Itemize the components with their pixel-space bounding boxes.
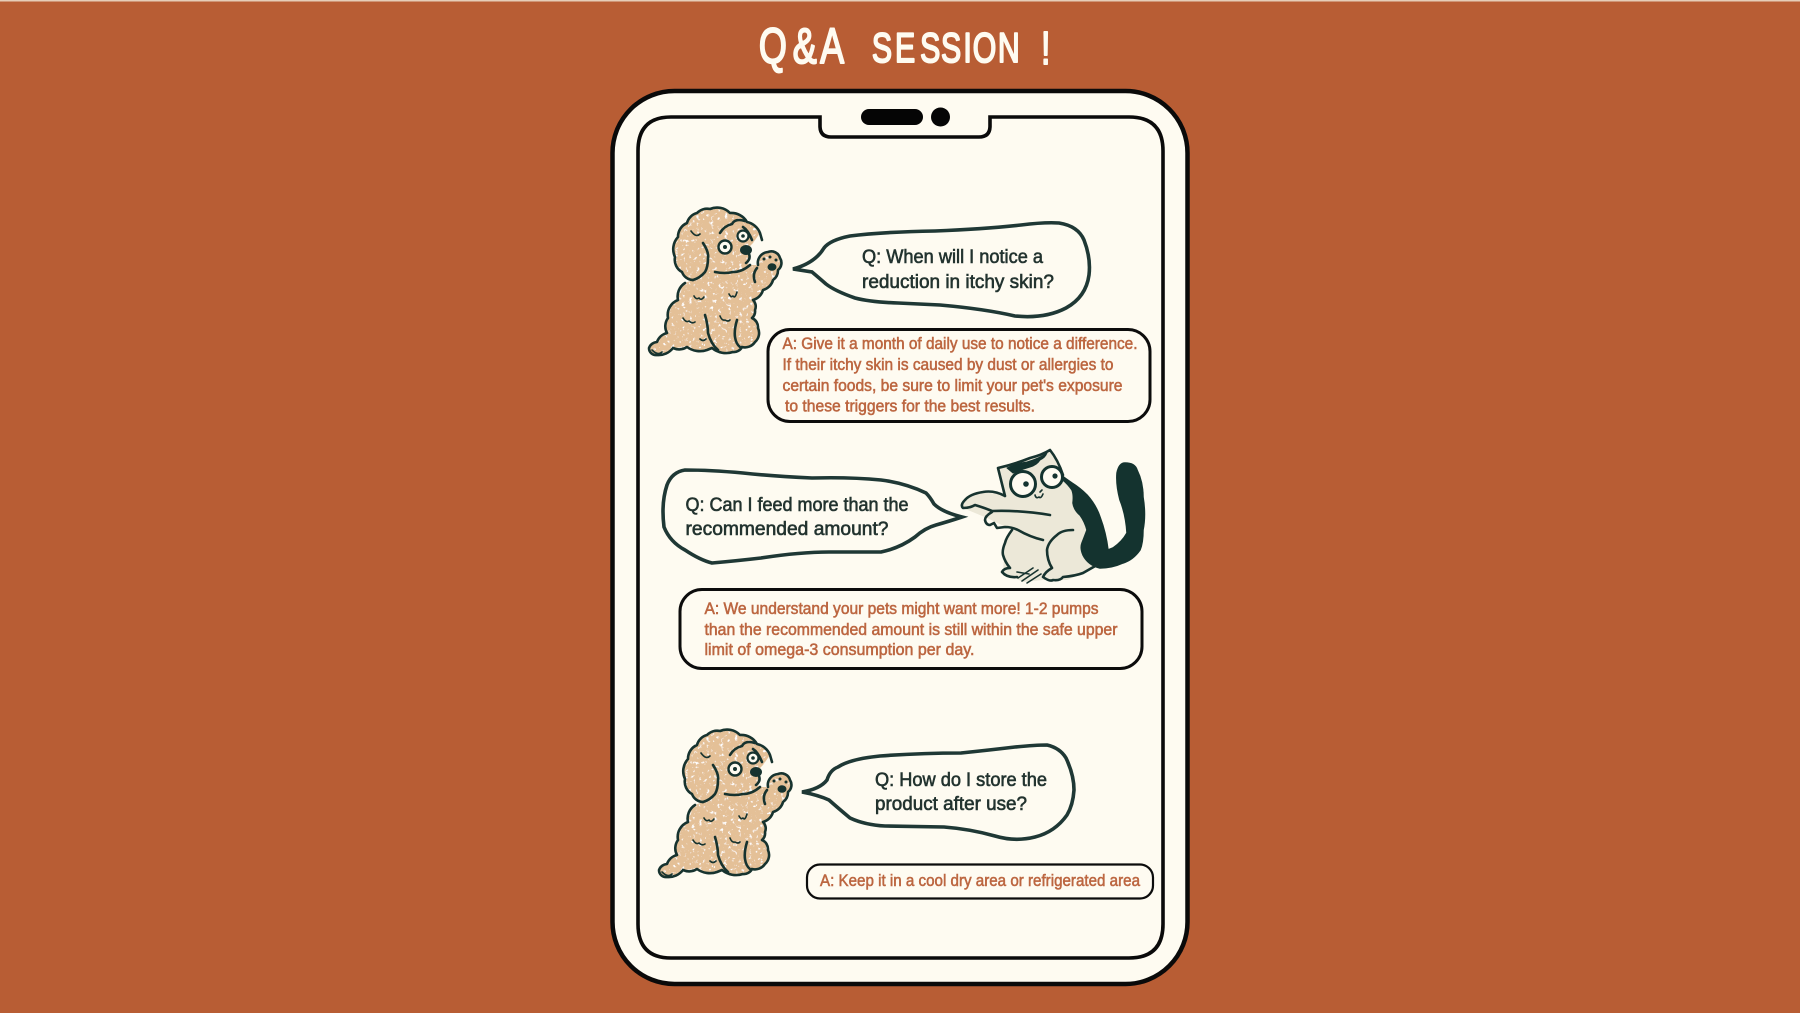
speech bubble 3 <box>802 745 1074 839</box>
answer box 1: to these triggers for the best results. <box>785 398 1035 416</box>
title: SESSION <box>872 24 1020 71</box>
answer box 3: A: Keep it in a cool dry area or refrigerated area <box>820 872 1141 890</box>
answer box 3 <box>807 864 1153 898</box>
answer box 1: If their itchy skin is caused by dust or allergies to <box>782 356 1114 374</box>
title: ! <box>1041 24 1050 74</box>
speech bubble 1 <box>793 223 1089 317</box>
answer box 1 <box>768 330 1150 422</box>
question 3 text: product after use? <box>875 793 1027 815</box>
question 3 text: Q: How do I store the <box>875 769 1047 791</box>
phone camera <box>931 108 950 126</box>
section: question 1 <box>649 208 1089 355</box>
section: question 2 <box>663 450 1144 583</box>
answer box 1: A: Give it a month of daily use to notice a difference. <box>782 335 1138 353</box>
answer box 2: A: We understand your pets might want more! 1-2 pumps <box>704 600 1098 618</box>
answer box 2: limit of omega-3 consumption per day. <box>704 641 974 659</box>
question 1 text: Q: When will I notice a <box>862 246 1043 268</box>
icon: dog <box>649 208 781 355</box>
answer box 2: than the recommended amount is still within the safe upper <box>704 621 1118 639</box>
question 2 text: recommended amount? <box>686 518 889 540</box>
icon: dog waving <box>659 730 791 877</box>
phone frame <box>612 91 1188 984</box>
speech bubble 2 <box>663 470 962 563</box>
answer box 2 <box>680 590 1142 668</box>
phone screen with notch <box>638 117 1163 958</box>
question 2 text: Q: Can I feed more than the <box>686 494 908 516</box>
answer box 1: certain foods, be sure to limit your pet's exposure <box>782 377 1122 395</box>
section: question 3 <box>659 730 1074 877</box>
title: Q&A <box>759 19 844 74</box>
question 1 text: reduction in itchy skin? <box>862 271 1054 293</box>
phone speaker <box>861 109 923 125</box>
icon: cat <box>962 450 1144 583</box>
title <box>759 19 1050 74</box>
